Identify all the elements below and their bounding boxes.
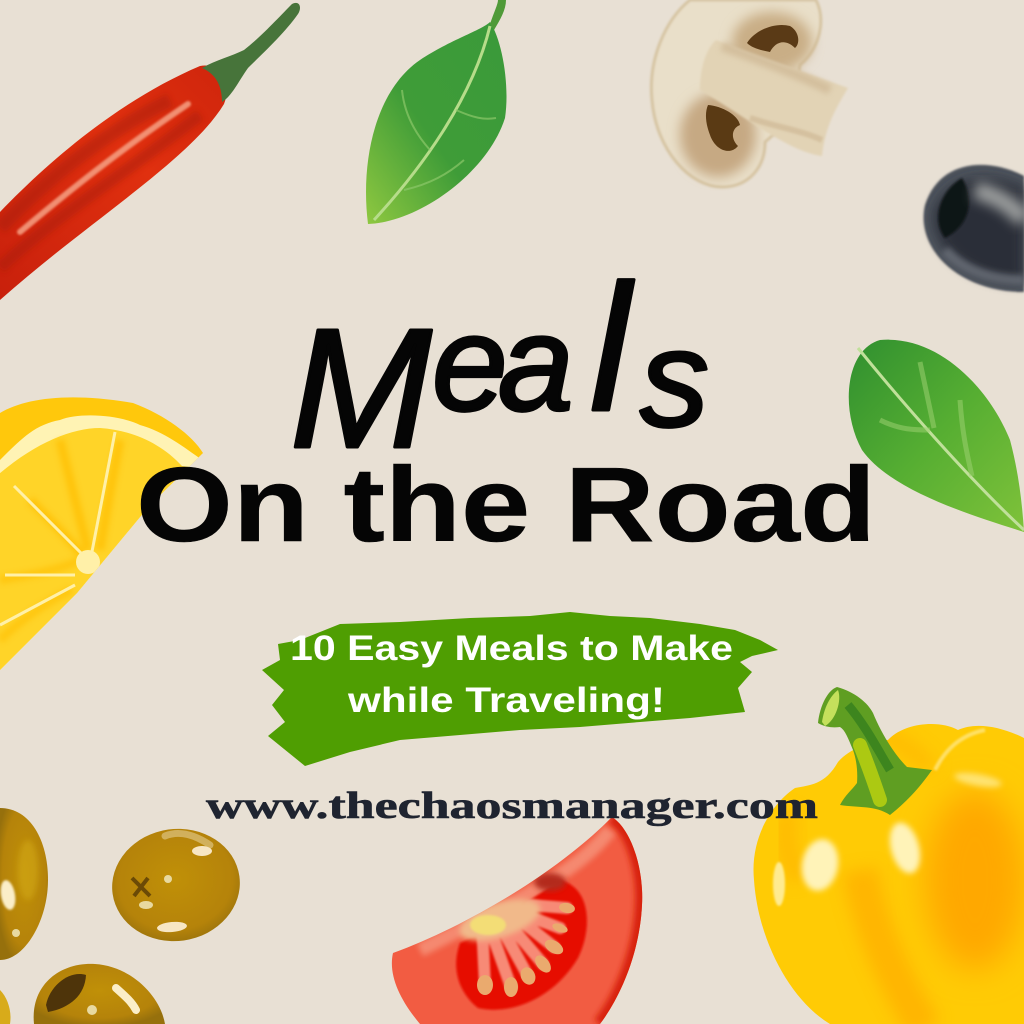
subtitle text: 10 Easy Meals to Make [290, 629, 733, 668]
subtitle text: while Traveling! [347, 681, 665, 720]
icon: tomato wedge [385, 810, 650, 1024]
icon: yellow bell pepper [745, 687, 1024, 1024]
pepper stem [818, 687, 932, 815]
website url: www.thechaosmanager.com [206, 785, 818, 827]
tomato core [456, 880, 587, 1010]
icon: basil leaf top [366, 0, 507, 224]
upper gill shade [732, 12, 812, 72]
seeds [477, 902, 576, 997]
icon: basil leaf right [849, 340, 1024, 532]
title: Meals script: M [290, 294, 432, 484]
banner: subtitle brush stroke [262, 612, 778, 766]
icon: lemon slice [0, 397, 203, 670]
pepper highlights [798, 836, 842, 894]
title: Meals script: s [640, 302, 709, 456]
lower gill shade [680, 93, 756, 177]
icon: black olive [924, 165, 1024, 292]
icon: mushroom [651, 0, 848, 187]
title: On the Road: On the Road [136, 446, 876, 564]
title: Meals script: a [498, 287, 574, 439]
icon: small olive corner [0, 990, 11, 1024]
yellow centre [458, 896, 544, 945]
icon: green olive left [0, 808, 48, 960]
lower gill dark [706, 105, 740, 151]
title: Meals script: e [432, 287, 508, 439]
tomato ribs [482, 905, 567, 987]
mushroom stem [700, 40, 848, 156]
icon: red chili pepper [0, 3, 300, 300]
upper gill dark [747, 25, 798, 52]
title: Meals script: l [590, 248, 635, 449]
icon: green olive middle [105, 821, 247, 949]
icon: green olive bottom [34, 964, 165, 1024]
mushroom cap [651, 0, 821, 187]
